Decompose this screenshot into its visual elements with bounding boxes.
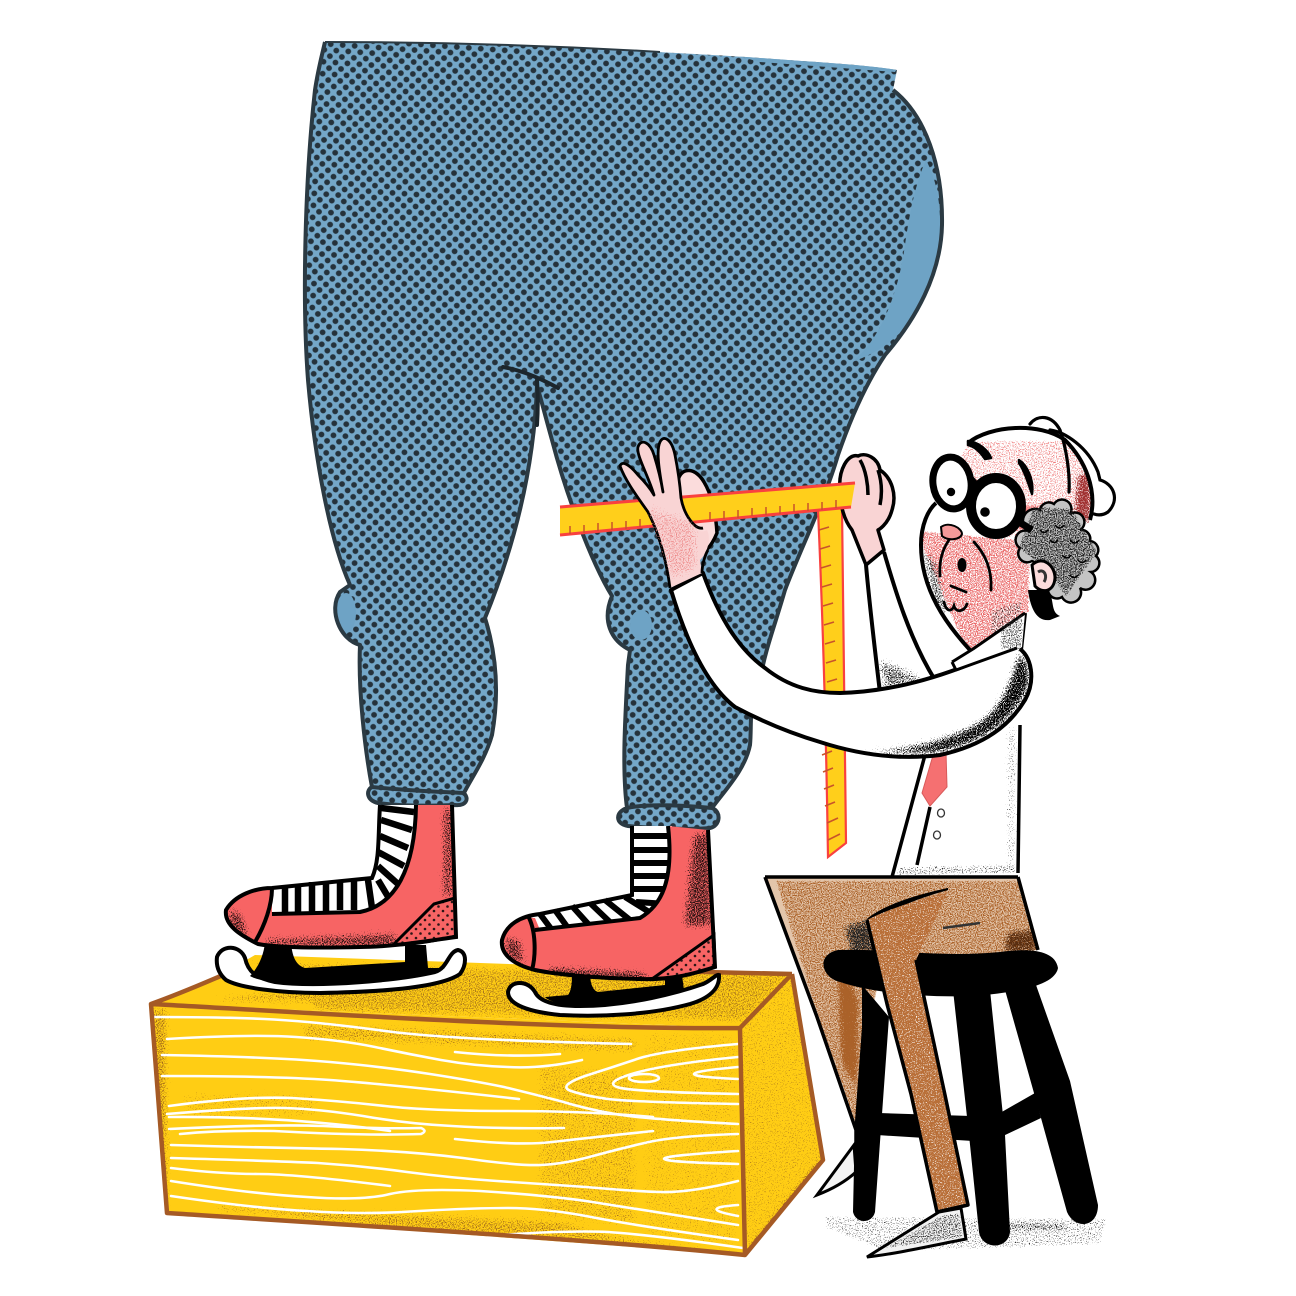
stool seat: [823, 950, 1058, 996]
eyebrows: [968, 441, 1032, 494]
collar: [952, 613, 1025, 670]
left skate boot: [226, 805, 456, 950]
box top face: [151, 955, 800, 1028]
ear: [1032, 561, 1055, 591]
left hand thumb behind ruler: [678, 470, 717, 555]
curly grey hair: [1016, 500, 1099, 603]
left skate blade and runner: [217, 942, 465, 993]
wooden box: [150, 955, 825, 1260]
horizontal ruler: [560, 483, 855, 535]
box outline: [151, 968, 823, 1255]
hair strands on top: [1030, 417, 1114, 515]
white shirt arm measuring: [671, 573, 1032, 757]
nose: [941, 525, 962, 539]
box front face with wood grain: [150, 1004, 745, 1256]
vertical measuring tape: [818, 508, 846, 857]
crotch fold: [503, 367, 558, 425]
trouser outline: [305, 42, 942, 829]
highlight: seat: [740, 56, 940, 362]
facial lines and mouth: [940, 540, 991, 611]
right skate heel: [652, 935, 715, 979]
waist top edge: [325, 42, 660, 52]
left skate heel: [393, 898, 456, 945]
shirt torso: [892, 725, 1020, 877]
tie: [922, 752, 947, 806]
highlight: right knee: [630, 610, 652, 640]
man's body: [866, 552, 1020, 877]
right skate sock: [525, 826, 676, 930]
left skate sock: [268, 805, 416, 912]
floor shadow under stool: [825, 1216, 1108, 1252]
box right face: [742, 976, 821, 1249]
right hand back fingers: [840, 455, 894, 565]
trousers: far leg and thigh: [765, 877, 1040, 1195]
shirt placket and buttons: [917, 807, 930, 865]
stool leg right: [1005, 985, 1098, 1224]
blue trousers with halftone: [305, 42, 942, 829]
wooden stool: [823, 950, 1098, 1246]
head shape: [915, 428, 1095, 650]
left ice skate: [217, 805, 465, 993]
right ice skate: [502, 826, 719, 1016]
far sleeve: [866, 552, 935, 695]
man's head: [915, 417, 1114, 650]
left hand with spread fingers: [620, 438, 709, 588]
right skate boot: [502, 826, 715, 985]
stool leg centre: [953, 990, 1010, 1246]
highlight: left knee: [336, 593, 356, 633]
wood grain lines: [153, 1017, 743, 1248]
glasses and eyes: [930, 455, 1032, 534]
stool leg left: [853, 985, 889, 1221]
trousers: near leg and shoe: [865, 892, 970, 1258]
right skate blade and runner: [508, 972, 719, 1016]
stool stretcher: [877, 1093, 1041, 1141]
dark hair at neck: [1028, 590, 1060, 620]
